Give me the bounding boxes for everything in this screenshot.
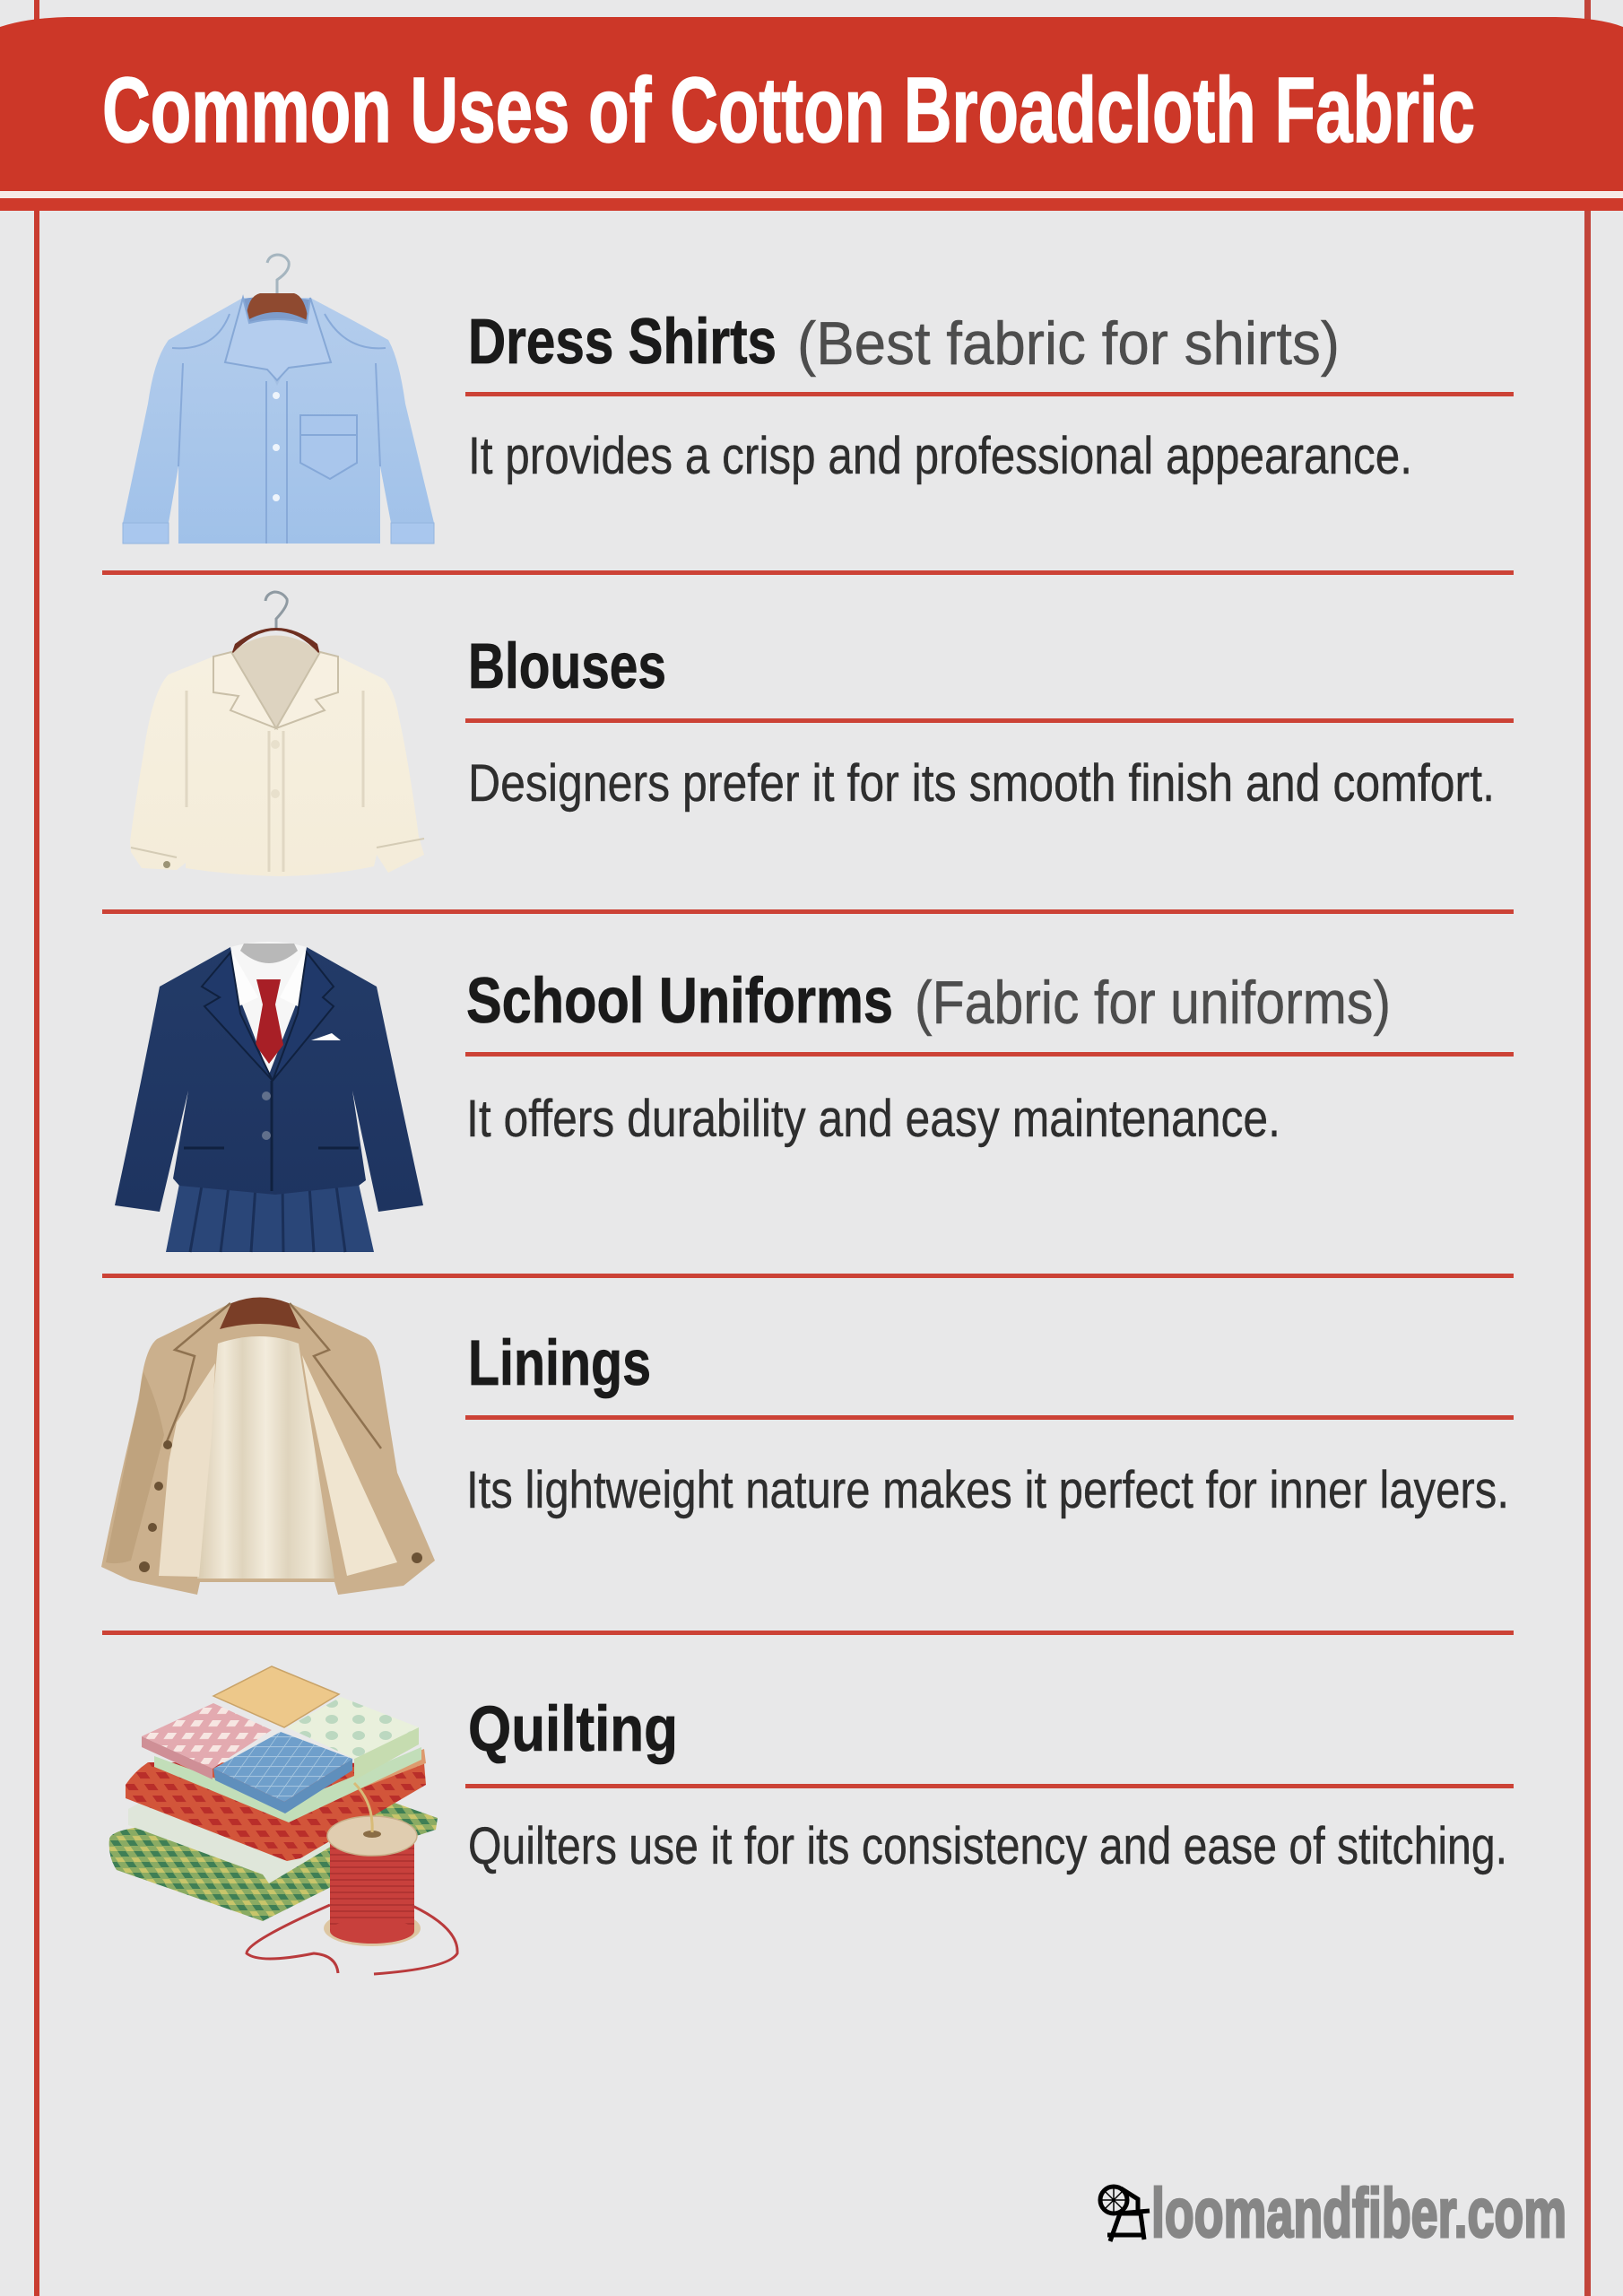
panel: blouses xyxy=(130,592,1514,876)
icon: stack of quilting fabric and thread spool xyxy=(109,1666,457,1974)
panel: dress shirts xyxy=(123,255,1514,544)
heading: linings: Linings xyxy=(468,1328,651,1399)
left frame line xyxy=(34,0,39,2296)
icon: cream blouse on hanger xyxy=(130,592,424,876)
panel: school uniforms xyxy=(115,942,1514,1252)
panel: quilting xyxy=(109,1666,1514,1974)
icon: spinning wheel xyxy=(1100,2187,1150,2241)
icon: beige jacket with open lining xyxy=(101,1297,435,1595)
description: It offers durability and easy maintenance. xyxy=(466,1090,1280,1148)
heading: blouses: Blouses xyxy=(468,631,666,702)
description: It provides a crisp and professional appearance. xyxy=(468,427,1412,485)
note: fabric for uniforms: (Fabric for uniforms) xyxy=(915,969,1391,1037)
panel: linings xyxy=(101,1297,1514,1595)
footer logo xyxy=(1100,2175,1567,2252)
right frame line xyxy=(1584,0,1591,2296)
header banner xyxy=(0,17,1623,211)
heading: quilting: Quilting xyxy=(468,1694,678,1765)
note: best fabric for shirts: (Best fabric for shirts) xyxy=(797,309,1340,378)
icon: navy school uniform xyxy=(115,942,423,1252)
heading: school uniforms: School Uniforms xyxy=(466,966,893,1037)
icon: blue dress shirt on hanger xyxy=(123,255,434,544)
heading: dress shirts: Dress Shirts xyxy=(468,307,777,378)
